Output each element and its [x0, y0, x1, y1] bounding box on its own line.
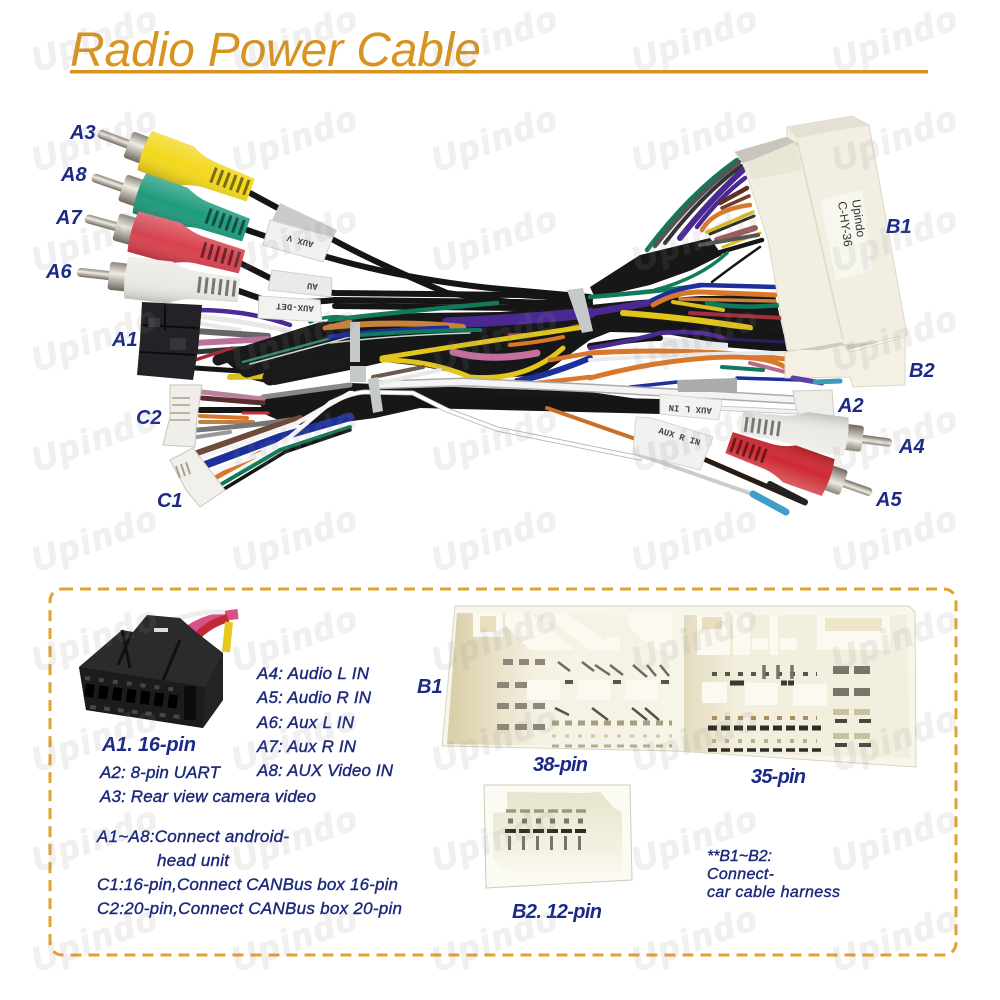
watermark grid: Upindo [827, 99, 962, 180]
callout labels: A2 [837, 395, 864, 417]
watermark grid: Upindo [227, 99, 362, 180]
C1 wires [197, 393, 352, 489]
C2 connector [163, 385, 202, 447]
watermark grid: Upindo [627, 699, 762, 780]
connection notes [96, 827, 402, 918]
watermark grid: Upindo [27, 99, 162, 180]
watermark grid: Upindo [627, 899, 762, 980]
fan of wires into B1 top [647, 160, 762, 290]
A1 connector [137, 302, 202, 380]
B1 cable connector [735, 116, 907, 350]
tag: AUX-DET [258, 296, 322, 322]
watermark grid: Upindo [227, 699, 362, 780]
watermark grid: Upindo [627, 399, 762, 480]
label: 38-pin: 38-pin [533, 754, 588, 776]
photo: B1 connector face [442, 606, 916, 767]
pins 38-pin side [497, 662, 672, 746]
watermark grid: Upindo [227, 199, 362, 280]
tag: AUX-DET: AUX-DET [275, 300, 314, 313]
callout labels [45, 122, 935, 512]
legend: A4 to A8: A4: Audio L IN [256, 664, 370, 683]
watermark grid: Upindo [627, 599, 762, 680]
note: B1 B2 connect: car cable harness [707, 884, 840, 901]
watermark grid: Upindo [27, 399, 162, 480]
watermark grid: Upindo [227, 299, 362, 380]
RCA plug A7 red [79, 198, 248, 282]
watermark grid: Upindo [827, 399, 962, 480]
C1 connector [170, 448, 225, 507]
tag: AUX L IN: AUX L IN [668, 402, 712, 415]
callout labels: A5 [875, 489, 902, 511]
connection notes: C1:16-pin,Connect CANBus box 16-pin [97, 875, 398, 894]
label: B2 12-pin: B2. 12-pin [512, 901, 602, 923]
RCA plug A5 red [723, 424, 878, 511]
watermark grid: Upindo [827, 199, 962, 280]
callout labels: A4 [898, 436, 925, 458]
heading: A1 16-pin: A1. 16-pin [101, 734, 196, 756]
connection notes: A1~A8:Connect android- [96, 827, 289, 846]
watermark grid: Upindo [27, 299, 162, 380]
RCA plug A8 green [85, 157, 253, 250]
watermark grid: Upindo [827, 0, 962, 80]
title: Radio Power Cable [70, 24, 481, 77]
watermark grid: Upindo [427, 199, 562, 280]
watermark grid: Upindo [27, 799, 162, 880]
watermark grid: Upindo [427, 499, 562, 580]
watermark grid: Upindo [427, 399, 562, 480]
legend: A4 to A8: A6: Aux L IN [256, 713, 355, 732]
white tag near B2 [663, 337, 728, 350]
watermark grid: Upindo [427, 899, 562, 980]
watermark grid: Upindo [827, 299, 962, 380]
panel: pinout details [50, 589, 956, 955]
photo: A1 16-pin connector [79, 612, 238, 728]
title [70, 24, 928, 77]
B2 cable connector [785, 337, 905, 387]
RCA plug A4 white [739, 404, 895, 462]
tag: grey right [677, 378, 737, 392]
blue and purple wire tips [753, 378, 840, 512]
watermark grid: Upindo [627, 299, 762, 380]
watermark grid: Upindo [27, 499, 162, 580]
legend: A2 and A3: A2: 8-pin UART [99, 763, 222, 782]
watermark grid: Upindo [427, 0, 562, 80]
watermark grid: Upindo [627, 0, 762, 80]
tag: AUX [268, 270, 332, 297]
watermark grid: Upindo [627, 99, 762, 180]
watermark grid: Upindo [227, 0, 362, 80]
tag: AUX V [263, 203, 337, 262]
tag: AUX R IN: AUX R IN [657, 426, 701, 449]
lower bundle with white and blue leads [330, 367, 805, 503]
photo: B2 12-pin connector [484, 785, 632, 888]
black mass of the central bundle [218, 238, 787, 425]
watermark grid: Upindo [27, 699, 162, 780]
watermark grid: Upindo [627, 799, 762, 880]
watermark grid: Upindo [427, 99, 562, 180]
black cables from the left RCA plugs [236, 193, 590, 309]
legend: A4 to A8: A8: AUX Video IN [256, 761, 394, 780]
B1 cable connector: Upindo [849, 198, 868, 238]
watermark grid: Upindo [827, 899, 962, 980]
A2 connector [793, 390, 834, 418]
callout labels: C2 [136, 407, 162, 429]
B1 cable connector: C-HY-36 [835, 200, 855, 248]
watermark grid: Upindo [827, 799, 962, 880]
cable harness photo [75, 113, 907, 512]
tag: AUX V: AUX V [286, 232, 315, 249]
watermark grid: Upindo [227, 899, 362, 980]
callout labels: A7 [55, 207, 82, 229]
tag: AUX R IN [633, 417, 713, 470]
callout labels: C1 [157, 490, 183, 512]
watermark grid: Upindo [227, 399, 362, 480]
wires from A1 connector [195, 310, 350, 378]
watermark grid: Upindo [427, 599, 562, 680]
watermark grid: Upindo [27, 0, 162, 80]
callout labels: A1 [111, 329, 138, 351]
pins 35-pin side [708, 665, 873, 750]
legend: A4 to A8: A5: Audio R IN [256, 688, 372, 707]
watermark grid: Upindo [27, 599, 162, 680]
callout labels: A6 [45, 261, 72, 283]
note: B1 B2 connect: Connect- [707, 866, 774, 883]
watermark grid: Upindo [827, 599, 962, 680]
legend: A2 and A3 [99, 763, 316, 806]
coloured wires in the central bundle [330, 303, 590, 383]
watermark grid: Upindo [427, 799, 562, 880]
RCA plug A3 yellow [91, 113, 258, 210]
key towers 38-pin side [473, 613, 672, 700]
tag: AUX L IN [660, 394, 722, 420]
watermark grid: Upindo [227, 599, 362, 680]
watermark grid: Upindo [227, 799, 362, 880]
RCA plug A6 white [75, 251, 241, 311]
key towers 35-pin side [697, 615, 890, 706]
note: B1 B2 connect [707, 848, 840, 901]
watermark grid: Upindo [627, 499, 762, 580]
watermark grid: Upindo [827, 699, 962, 780]
C2 wires [197, 385, 350, 437]
connection notes: head unit [157, 851, 230, 870]
lower wires into B2 [590, 332, 800, 387]
wires into B1 lower side [590, 285, 785, 336]
watermark grid: Upindo [27, 199, 162, 280]
tag: AUX: AU [307, 280, 318, 291]
callout labels: B1 [886, 216, 912, 238]
watermark grid: Upindo [427, 299, 562, 380]
watermark grid: Upindo [627, 199, 762, 280]
note: B1 B2 connect: **B1~B2: [707, 848, 772, 865]
watermark grid: Upindo [27, 899, 162, 980]
watermark grid: Upindo [827, 499, 962, 580]
legend: A4 to A8 [256, 664, 394, 780]
watermark grid: Upindo [227, 499, 362, 580]
cable ties [350, 288, 593, 413]
callout labels: B2 [909, 360, 935, 382]
legend: A4 to A8: A7: Aux R IN [256, 737, 357, 756]
watermark grid: Upindo [427, 699, 562, 780]
legend: A2 and A3: A3: Rear view camera video [99, 787, 316, 806]
label: B1: B1 [417, 676, 443, 698]
callout labels: A3 [69, 122, 96, 144]
callout labels: A8 [60, 164, 87, 186]
label: 35-pin: 35-pin [751, 766, 806, 788]
connection notes: C2:20-pin,Connect CANBus box 20-pin [97, 899, 402, 918]
